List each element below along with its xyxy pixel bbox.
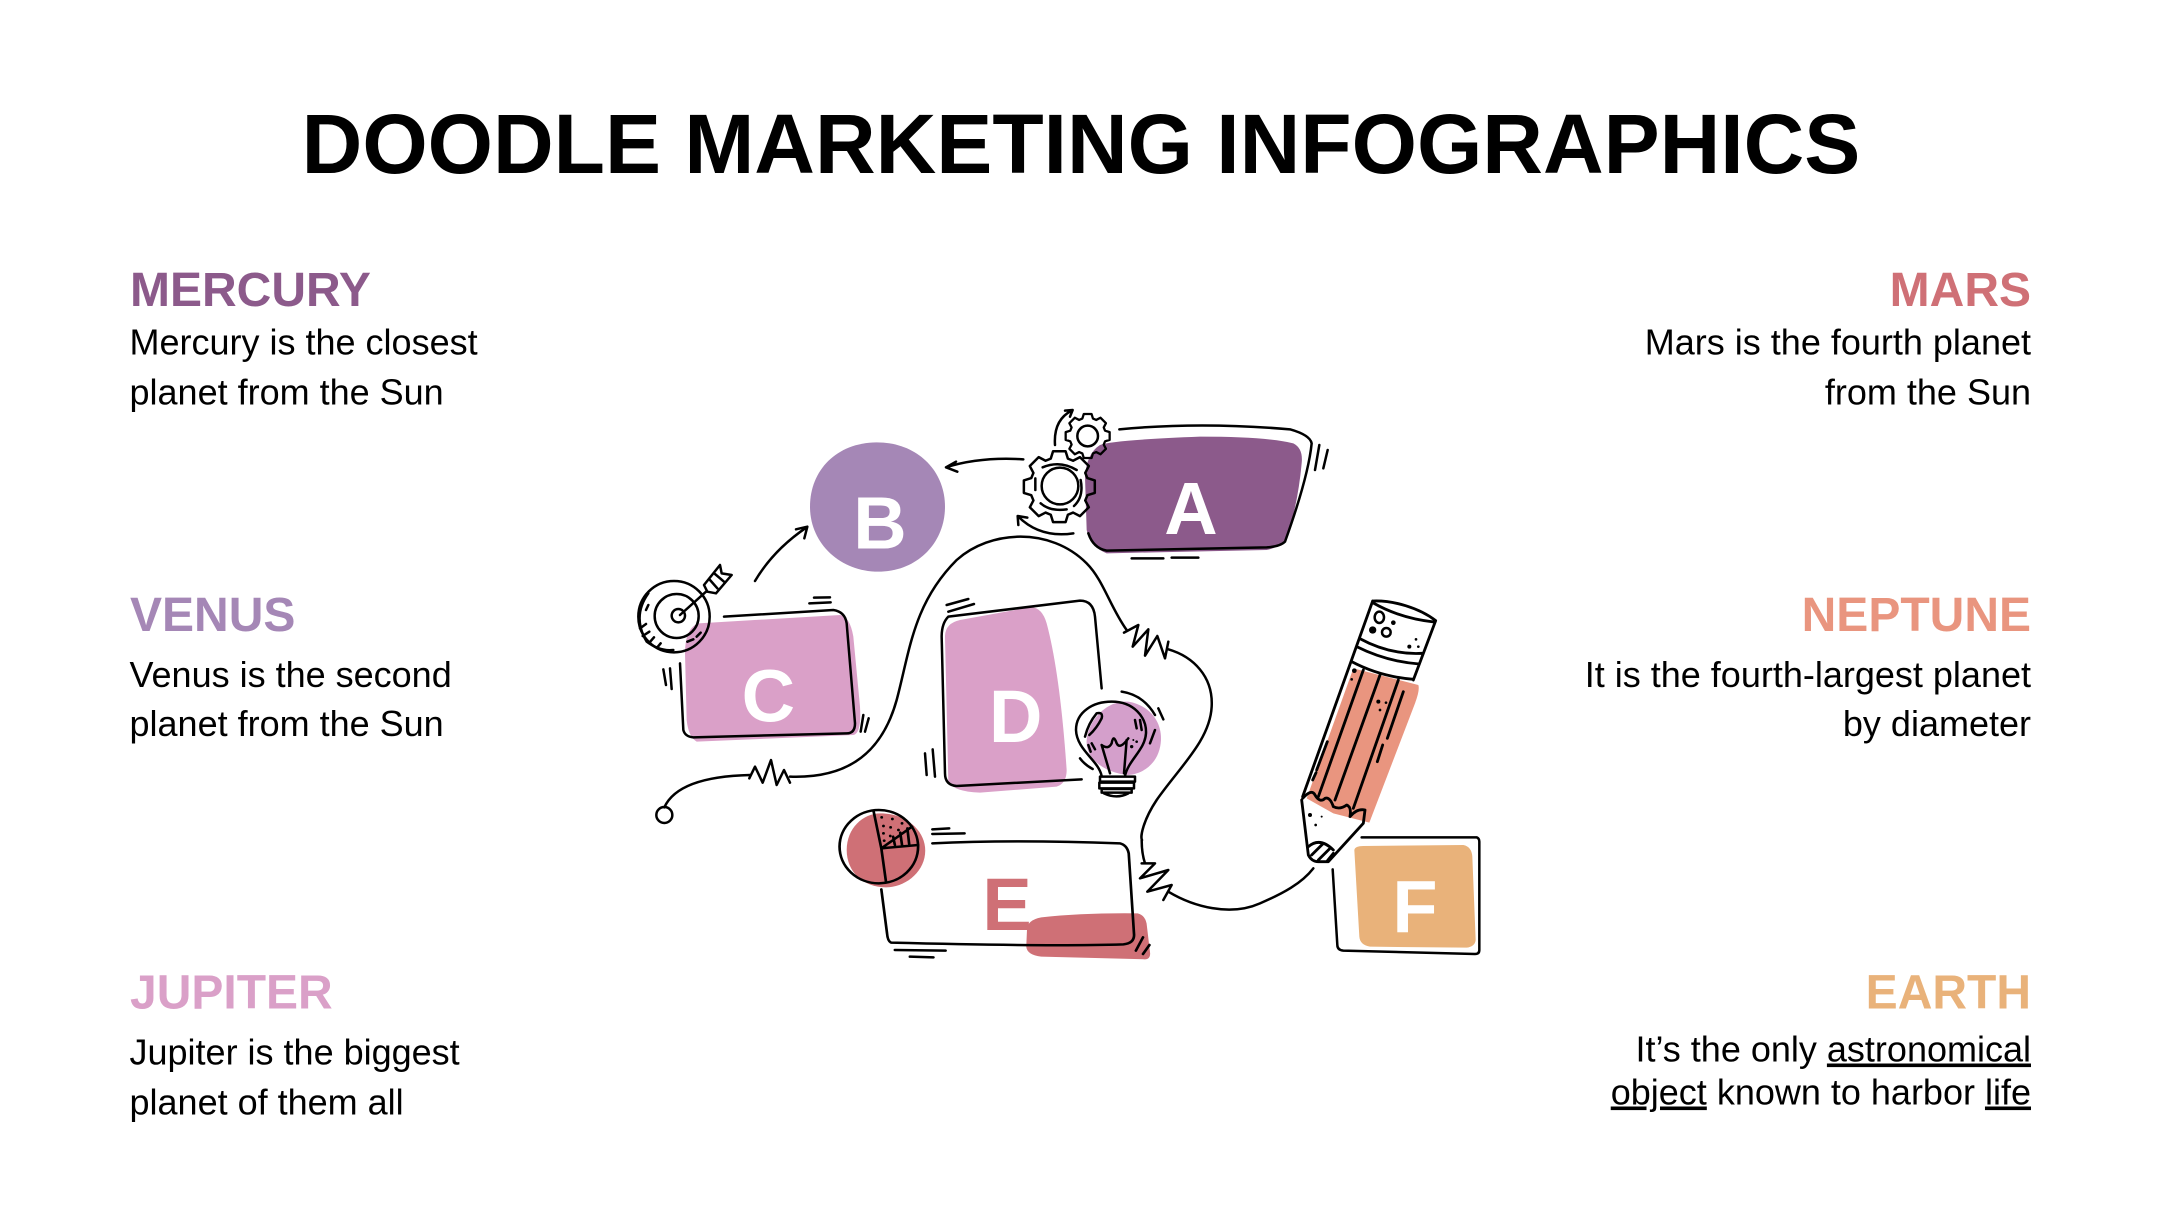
text block: Mercury [130,264,478,412]
circle B: B [853,481,907,564]
card C [663,597,869,742]
heading: Earth: EARTH [1866,966,2031,1020]
text block: Earth [1611,966,2031,1112]
body: Neptune: It is the fourth-largest planet [1585,654,2031,695]
icon: target with arrow [638,565,732,652]
icon: pencil [1302,601,1436,862]
body: Mercury: Mercury is the closest [130,322,478,362]
card D [925,599,1102,793]
card F: F [1392,866,1438,949]
arrow: gears to B [946,459,1023,472]
icon: gears with arrows [1018,410,1110,534]
body: Mars: Mars is the fourth planet [1645,322,2031,362]
body: Earth: known to harbor life [1717,1072,2031,1112]
body: Jupiter: planet of them all [130,1082,404,1122]
card C: C [742,654,795,737]
card D: D [989,675,1042,758]
card E [881,828,1150,959]
text block: Neptune [1585,589,2031,744]
body: Mars: from the Sun [1825,372,2031,412]
icon: light bulb [1076,692,1163,796]
text block: Mars [1645,264,2031,412]
text block: Venus [130,589,452,744]
arrow: target to B [755,527,807,581]
card A: A [1164,467,1218,550]
body: Earth: object [1611,1072,1707,1112]
body: Earth: It’s the only astronomical [1635,1028,2031,1070]
body: Neptune: by diameter [1843,703,2031,744]
body: Mercury: planet from the Sun [130,372,444,412]
card E: E [982,863,1032,946]
body: Venus: Venus is the second [130,654,452,695]
flow line connecting the steps [656,537,1313,910]
text block: Jupiter [130,966,460,1122]
circle B [810,442,945,572]
icon: pie chart [840,810,925,887]
heading: Mercury: MERCURY [130,264,371,317]
heading: Venus: VENUS [130,589,295,642]
title: DOODLE MARKETING INFOGRAPHICS [302,97,1860,191]
heading: Mars: MARS [1890,264,2031,317]
card A [1085,425,1328,558]
body: Jupiter: Jupiter is the biggest [130,1032,460,1072]
heading: Jupiter: JUPITER [130,966,333,1020]
body: Venus: planet from the Sun [130,703,444,744]
heading: Neptune: NEPTUNE [1802,589,2031,642]
card F [1333,837,1479,954]
